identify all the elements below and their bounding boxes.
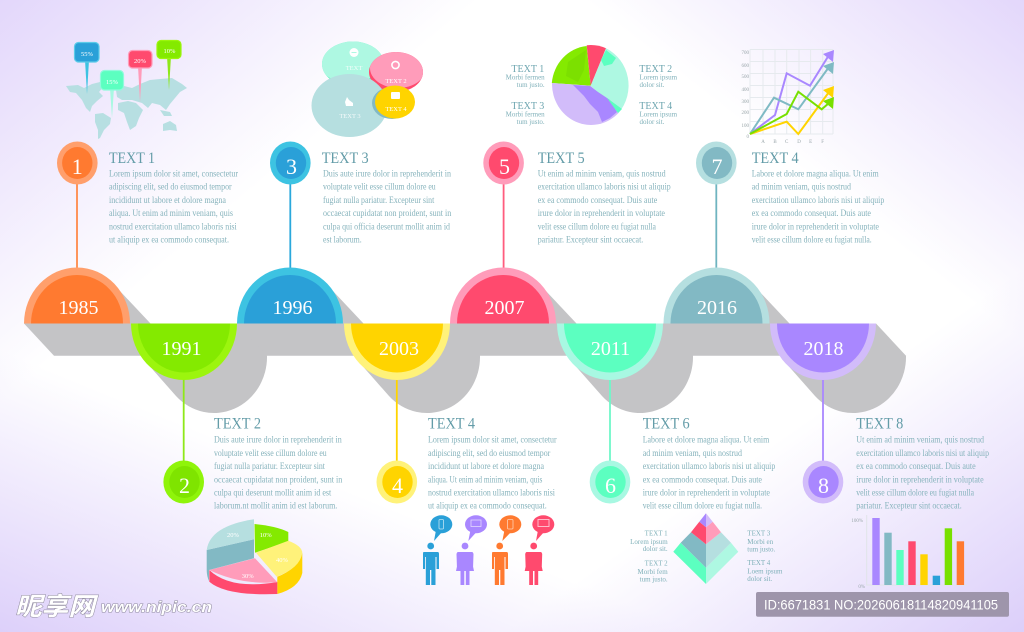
text block 6: exercitation ullamco laboris nisi ut aliquip — [643, 461, 776, 471]
pie label: text 2: dolor sit. — [640, 81, 665, 89]
watermark: image id bar — [756, 592, 1009, 617]
badge 4 — [376, 460, 417, 504]
pin 15%: 15% — [106, 79, 119, 86]
text block 6: TEXT 6 — [643, 416, 690, 433]
text block 1 — [109, 150, 238, 244]
text block 2: Duis aute irure dolor in reprehenderit in — [214, 435, 342, 445]
pyramid label: text 3: Morbi en — [747, 538, 774, 546]
text block 5: pariatur. Excepteur sint occaecat. — [538, 234, 643, 244]
text block 7: TEXT 4 — [752, 150, 799, 167]
badge 3: 3 — [286, 154, 297, 179]
y axis labels: 400 — [742, 88, 750, 93]
text block 4: nostrud exercitation ullamco laboris nisi — [428, 488, 555, 498]
pin 55%: 55% — [81, 51, 94, 58]
text block 5: irure dolor in reprehenderit in voluptate — [538, 208, 665, 218]
pyramid chart — [630, 513, 783, 584]
badge 2: 2 — [179, 473, 190, 498]
watermark: nipic logo: www.nipic.cn — [101, 599, 212, 616]
pie label: text 2: TEXT 2 — [639, 64, 672, 75]
year 2018 semicircle — [770, 324, 876, 380]
pyramid label: text 1: Lorem ipsum — [630, 538, 668, 546]
year 1985 semicircle: 1985 — [58, 297, 98, 319]
text block 3: fugiat nulla pariatur. Excepteur sint — [323, 195, 435, 205]
slice: 10%: 10% — [260, 532, 272, 539]
text block 1: TEXT 1 — [109, 150, 155, 167]
series lines — [750, 55, 829, 134]
bubble: text 3: TEXT 3 — [339, 113, 361, 120]
pie label: text 2: Lorem ipsum — [640, 74, 678, 82]
pyramid label: text 1 — [630, 530, 668, 553]
text block 8: irure dolor in reprehenderit in voluptate — [856, 474, 984, 484]
text block 2: TEXT 2 — [214, 416, 261, 433]
text block 2: laborum.nt mollit anim id est laborum. — [214, 501, 337, 511]
bar chart: 0% — [858, 585, 865, 590]
pie label: text 4: dolor sit. — [640, 118, 665, 126]
text block 3: TEXT 3 — [322, 150, 369, 167]
year 2003 semicircle — [344, 324, 450, 380]
text block 7: ex ea commodo consequat. Duis aute — [752, 208, 871, 218]
text block 1: aliqua. Ut enim ad minim veniam, quis — [109, 208, 233, 218]
pyramid label: text 1: dolor sit. — [643, 545, 668, 553]
year 1996 semicircle — [237, 268, 343, 324]
pie label: text 3: Morbi fermen — [506, 110, 545, 118]
pie label: text 1: TEXT 1 — [511, 64, 544, 75]
text block 4 — [428, 416, 557, 511]
pie label: text 3: tum justo. — [517, 118, 545, 126]
pyramid label: text 4: TEXT 4 — [747, 559, 771, 567]
year 1991 semicircle: 1991 — [162, 338, 202, 360]
x axis labels: B — [773, 140, 777, 145]
y axis labels: 500 — [742, 75, 750, 80]
pyramid label: text 1: TEXT 1 — [645, 530, 668, 538]
text block 2: voluptate velit esse cillum dolore eu — [214, 448, 327, 458]
text block 3 — [322, 150, 452, 244]
text block 5: velit esse cillum dolore eu fugiat nulla — [538, 221, 656, 231]
badge 1 — [57, 142, 98, 184]
text block 8: exercitation ullamco laboris nisi ut aliquip — [856, 448, 989, 458]
y axis labels: 0 — [746, 135, 750, 140]
y axis labels: 600 — [742, 64, 750, 69]
person 1 with phone bubble — [423, 515, 452, 585]
text block 1: incididunt ut labore et dolore magna — [109, 195, 226, 205]
text block 3: voluptate velit esse cillum dolore eu — [323, 182, 436, 192]
series arrowheads — [823, 50, 834, 109]
pyramid label: text 4: dolor sit. — [747, 575, 772, 583]
y axis labels: 300 — [742, 100, 750, 105]
badge 7 — [696, 142, 737, 184]
text block 6 — [643, 416, 776, 511]
pie label: text 1: tum justo. — [517, 81, 545, 89]
x axis labels: F — [821, 140, 824, 145]
year 1991 semicircle — [131, 324, 237, 380]
text block 1: Lorem ipsum dolor sit amet, consectetur — [109, 168, 238, 178]
badge 6 — [590, 460, 630, 504]
text block 4: adipiscing elit, sed do eiusmod tempor — [428, 448, 550, 458]
world map with percentage pins — [66, 40, 187, 139]
pie label: text 4: TEXT 4 — [639, 101, 672, 112]
pyramid label: text 2: tum justo. — [640, 576, 668, 584]
person 2 with laptop bubble — [456, 515, 487, 585]
text block 7: velit esse cillum dolore eu fugiat nulla. — [752, 234, 872, 244]
year 2011 semicircle — [557, 324, 663, 380]
pyramid label: text 3 — [747, 530, 776, 554]
person 4 with laptop bubble — [525, 515, 554, 585]
y axis labels: 200 — [742, 111, 750, 116]
text block 4: incididunt ut labore et dolore magna — [428, 461, 544, 471]
text block 5 — [538, 150, 671, 244]
text block 3: occaecat cupidatat non proident, sunt in — [323, 208, 452, 218]
badge 2 — [163, 460, 204, 504]
x axis labels: D — [797, 140, 801, 145]
y axis labels: 700 — [742, 51, 750, 56]
badge 5: 5 — [499, 154, 510, 179]
text block 7: exercitation ullamco laboris nisi ut aliquip — [752, 195, 885, 205]
pyramid label: text 4: Loem ipsum — [747, 568, 783, 576]
bubble: text 1: TEXT — [346, 65, 362, 72]
text block 3: est laborum. — [323, 234, 362, 244]
text block 5: exercitation ullamco laboris nisi ut aliquip — [538, 182, 671, 192]
year 1996 semicircle: 1996 — [272, 297, 312, 319]
bar chart: 100% — [851, 519, 863, 524]
pie label: text 4 — [639, 101, 678, 126]
text block 1: nostrud exercitation ullamco laboris nisi — [109, 221, 237, 231]
text block 6: Labore et dolore magna aliqua. Ut enim — [643, 435, 769, 445]
text block 4: ut aliquip ex ea commodo consequat. — [428, 501, 547, 511]
year 2007 semicircle — [450, 268, 556, 324]
text block 2: occaecat cupidatat non proident, sunt in — [214, 474, 343, 484]
y axis labels — [742, 51, 750, 140]
text block 1: ut aliquip ex ea commodo consequat. — [109, 234, 229, 244]
pie label: text 3: TEXT 3 — [511, 101, 544, 112]
text block 2 — [214, 416, 343, 511]
badge 8: 8 — [818, 473, 829, 498]
x axis labels: A — [761, 140, 765, 145]
text block 3: culpa qui officia deserunt mollit anim id — [323, 221, 450, 231]
text block 8 — [856, 416, 989, 511]
x axis labels — [761, 140, 824, 145]
pyramid label: text 2: TEXT 2 — [645, 560, 668, 568]
person 3 with phone bubble — [492, 515, 521, 585]
badge 8 — [803, 460, 843, 504]
text block 1: adipiscing elit, sed do eiusmod tempor — [109, 182, 232, 192]
text block 8: pariatur. Excepteur sint occaecat. — [856, 501, 962, 511]
slice: 40%: 40% — [276, 557, 289, 564]
text block 5: ex ea commodo consequat. Duis aute — [538, 195, 657, 205]
bar chart — [851, 515, 967, 590]
year 2003 semicircle: 2003 — [379, 338, 419, 360]
text block 4: aliqua. Ut enim ad minim veniam, quis — [428, 474, 543, 484]
year 2007 semicircle: 2007 — [484, 297, 524, 319]
pyramid label: text 2: Morbi fem — [638, 568, 668, 576]
text block 4: Lorem ipsum dolor sit amet, consectetur — [428, 435, 557, 445]
text block 2: fugiat nulla pariatur. Excepteur sint — [214, 461, 325, 471]
slice: 20%: 20% — [227, 532, 240, 539]
watermark: image id bar: ID:6671831 NO:20260618114820941105 — [764, 596, 998, 612]
pin 20%: 20% — [134, 58, 147, 65]
pie slices — [552, 45, 629, 125]
pyramid label: text 4 — [747, 559, 783, 583]
pie label: text 4: Lorem ipsum — [640, 110, 678, 118]
pie label: text 3 — [506, 101, 545, 126]
text block 8: Ut enim ad minim veniam, quis nostrud — [856, 435, 984, 445]
text block 6: irure dolor in reprehenderit in voluptate — [643, 488, 770, 498]
badge 4: 4 — [392, 473, 403, 498]
badge 3 — [270, 142, 311, 184]
bubble chart — [312, 37, 426, 137]
year 2016 semicircle: 2016 — [697, 297, 737, 319]
pie label: text 1: Morbi fermen — [506, 74, 545, 82]
pyramid label: text 3: tum justo. — [747, 546, 776, 554]
watermark: nipic logo — [15, 587, 212, 623]
text block 5: TEXT 5 — [538, 150, 585, 167]
text block 8: ex ea commodo consequat. Duis aute — [856, 461, 976, 471]
pyramid label: text 3: TEXT 3 — [747, 530, 771, 538]
text block 7 — [752, 150, 885, 244]
year 2016 semicircle — [664, 268, 770, 324]
year 2011 semicircle: 2011 — [591, 338, 630, 360]
text block 6: velit esse cillum dolore eu fugiat nulla. — [643, 501, 762, 511]
pyramid label: text 2 — [638, 560, 668, 584]
3D pie chart — [207, 519, 302, 594]
pin 10%: 10% — [164, 48, 176, 55]
x axis labels: E — [809, 140, 812, 145]
text block 5: Ut enim ad minim veniam, quis nostrud — [538, 168, 666, 178]
text block 3: Duis aute irure dolor in reprehenderit in — [323, 168, 451, 178]
map continents — [66, 78, 187, 139]
watermark: nipic logo: 昵享网 — [15, 587, 99, 623]
line chart — [742, 50, 834, 145]
badge 6: 6 — [605, 473, 616, 498]
text block 8: velit esse cillum dolore eu fugiat nulla — [856, 488, 974, 498]
text block 7: irure dolor in reprehenderit in voluptate — [752, 221, 879, 231]
badge 1: 1 — [72, 154, 83, 179]
text block 2: culpa qui deserunt mollit anim id est — [214, 488, 332, 498]
text block 7: Labore et dolore magna aliqua. Ut enim — [752, 168, 879, 178]
text block 7: ad minim veniam, quis nostrud — [752, 182, 851, 192]
text block 4: TEXT 4 — [428, 416, 475, 433]
text block 6: ad minim veniam, quis nostrud — [643, 448, 742, 458]
people with speech bubbles — [423, 515, 554, 585]
timeline ribbon shadow — [24, 290, 906, 413]
pie label: text 1 — [506, 64, 545, 89]
connector lines — [77, 180, 823, 465]
y axis labels: 100 — [742, 124, 750, 129]
badge 7: 7 — [712, 154, 722, 179]
year 1985 semicircle — [24, 268, 130, 324]
year 2018 semicircle: 2018 — [804, 338, 844, 360]
pyramid shape — [673, 513, 738, 584]
bubble: text 2: TEXT 2 — [385, 78, 407, 85]
x axis labels: C — [785, 140, 789, 145]
text block 8: TEXT 8 — [856, 416, 903, 433]
badge 5 — [483, 142, 524, 184]
bubble: text 4: TEXT 4 — [385, 106, 407, 113]
text block 6: ex ea commodo consequat. Duis aute — [643, 474, 762, 484]
slice: 30%: 30% — [242, 573, 254, 580]
continent pie chart — [506, 45, 678, 126]
pie label: text 2 — [639, 64, 678, 89]
